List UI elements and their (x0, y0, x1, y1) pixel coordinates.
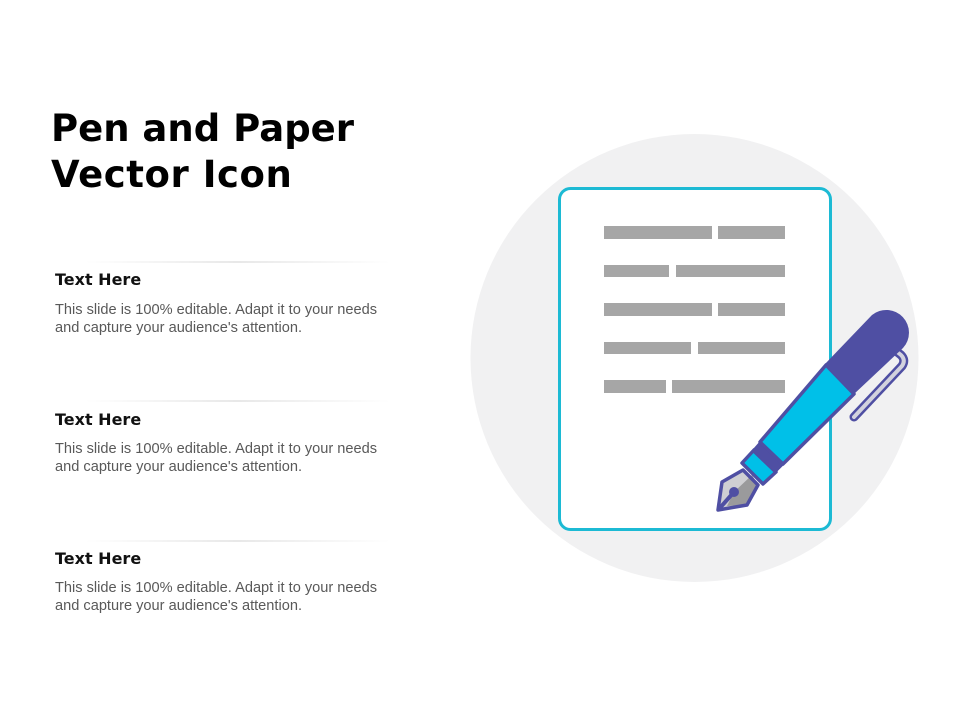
title (51, 107, 354, 196)
text block 1: This slide is 100% editable. Adapt it to your needs (55, 302, 377, 318)
text block 3: Text Here (55, 549, 141, 568)
pen nib (718, 470, 758, 510)
text block 1: Text Here (55, 270, 141, 289)
title: Vector Icon (51, 153, 292, 196)
title: Pen and Paper (51, 107, 354, 150)
text block 3: and capture your audience's attention. (55, 598, 302, 614)
pen (718, 310, 909, 510)
background circle (470, 134, 918, 582)
text block 2 (55, 410, 377, 475)
text block 3 (55, 549, 377, 614)
text lines on paper (604, 226, 785, 393)
text block 1: and capture your audience's attention. (55, 320, 302, 336)
pen barrel (760, 365, 854, 464)
text block 2: This slide is 100% editable. Adapt it to your needs (55, 441, 377, 457)
text block 2: Text Here (55, 410, 141, 429)
pen band (752, 443, 783, 473)
pen clip (854, 351, 904, 417)
pen cap (825, 310, 909, 395)
text block 3: This slide is 100% editable. Adapt it to your needs (55, 580, 377, 596)
paper sheet (560, 188, 830, 530)
pen collar (742, 450, 776, 484)
text block 1 (55, 270, 377, 336)
text block 2: and capture your audience's attention. (55, 459, 302, 475)
